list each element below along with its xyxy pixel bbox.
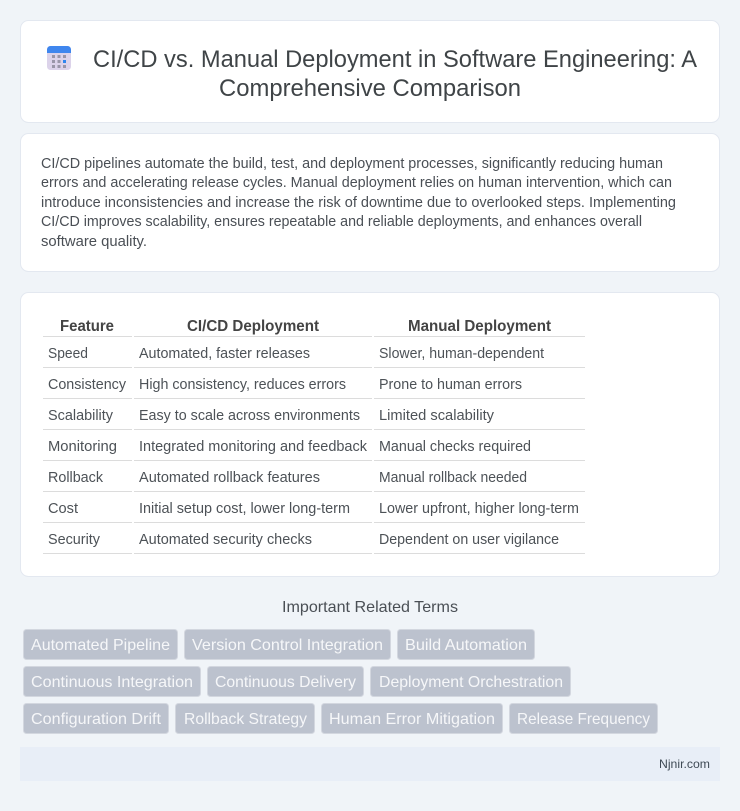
tag: continuous delivery — [208, 666, 364, 696]
row: rollback: Rollback — [48, 470, 104, 486]
row: consistency: High consistency, reduces errors — [139, 377, 346, 393]
tag: continuous delivery: Continuous Delivery — [215, 674, 356, 691]
tag: build automation — [398, 630, 534, 660]
table header row — [60, 318, 552, 335]
tag: automated pipeline — [24, 630, 178, 660]
tag: continuous integration: Continuous Integration — [31, 674, 193, 691]
icon: calendar — [47, 46, 71, 70]
tag group: related terms — [24, 630, 658, 734]
row: cost: Lower upfront, higher long-term — [379, 501, 579, 517]
row: security: Dependent on user vigilance — [379, 532, 559, 548]
row: monitoring: Integrated monitoring and feedback — [139, 439, 368, 455]
panel: summary paragraph: introduce inconsistencies and increase the risk of downtime due to overlooked steps. Implementing — [41, 195, 676, 211]
row: security: Security — [48, 532, 101, 548]
heading: important related terms: Important Related Terms — [282, 599, 458, 616]
header panel — [20, 20, 720, 122]
row: rollback: Automated rollback features — [139, 470, 320, 486]
footer bar — [20, 747, 720, 781]
tag: version control integration: Version Control Integration — [192, 637, 383, 654]
title: Comprehensive Comparison — [219, 75, 521, 102]
tag: release frequency — [510, 704, 658, 734]
panel: summary paragraph — [20, 134, 720, 272]
tag: continuous integration — [24, 666, 200, 696]
row: speed: Automated, faster releases — [139, 346, 310, 362]
row: scalability: Easy to scale across environments — [139, 408, 360, 424]
row: speed: Slower, human-dependent — [379, 346, 544, 362]
row: consistency — [48, 377, 522, 393]
panel: summary paragraph: CI/CD pipelines automate the build, test, and deployment processes, significantly reducing human — [41, 156, 663, 172]
row: cost: Cost — [48, 501, 78, 517]
footer bar: Njnir.com — [659, 757, 710, 771]
title: CI/CD vs. Manual Deployment in Software Engineering: A — [93, 46, 697, 73]
tag: human error mitigation — [322, 704, 502, 734]
panel: summary paragraph: errors and accelerating release cycles. Manual deployment relies on human intervention, which can — [41, 175, 672, 191]
row: monitoring: Manual checks required — [379, 439, 531, 455]
table header row: Feature — [60, 318, 114, 335]
table header row: CI/CD Deployment — [187, 318, 320, 335]
row: scalability — [48, 408, 495, 424]
row: cost — [48, 501, 579, 517]
tag: rollback strategy — [176, 704, 314, 734]
tag: automated pipeline: Automated Pipeline — [31, 637, 170, 654]
title — [93, 46, 697, 102]
tag: build automation: Build Automation — [405, 637, 527, 654]
tag: deployment orchestration — [370, 666, 570, 696]
tag: configuration drift: Configuration Drift — [31, 711, 162, 728]
row: scalability: Scalability — [48, 408, 114, 424]
panel: comparison table — [20, 292, 720, 576]
row: speed — [48, 346, 544, 362]
row: cost: Initial setup cost, lower long-term — [139, 501, 350, 517]
tag: deployment orchestration: Deployment Orchestration — [379, 674, 563, 691]
tag: version control integration — [184, 630, 390, 660]
row: monitoring: Monitoring — [48, 439, 117, 455]
tag: human error mitigation: Human Error Mitigation — [329, 711, 495, 728]
row: consistency: Consistency — [48, 377, 127, 393]
row: speed: Speed — [48, 346, 88, 362]
row: monitoring — [48, 439, 531, 455]
tag: configuration drift — [24, 704, 168, 734]
table header row: Manual Deployment — [408, 318, 552, 335]
panel: summary paragraph: software quality. — [41, 234, 147, 250]
row: security: Automated security checks — [139, 532, 312, 548]
row: rollback — [48, 470, 527, 486]
tag: rollback strategy: Rollback Strategy — [184, 711, 307, 728]
panel: summary paragraph: CI/CD improves scalability, ensures repeatable and reliable deployments, and enhances overall — [41, 214, 642, 230]
row: consistency: Prone to human errors — [379, 377, 522, 393]
row: security — [48, 532, 559, 548]
tag: release frequency: Release Frequency — [517, 711, 650, 728]
row: rollback: Manual rollback needed — [379, 470, 527, 486]
row: scalability: Limited scalability — [379, 408, 495, 424]
